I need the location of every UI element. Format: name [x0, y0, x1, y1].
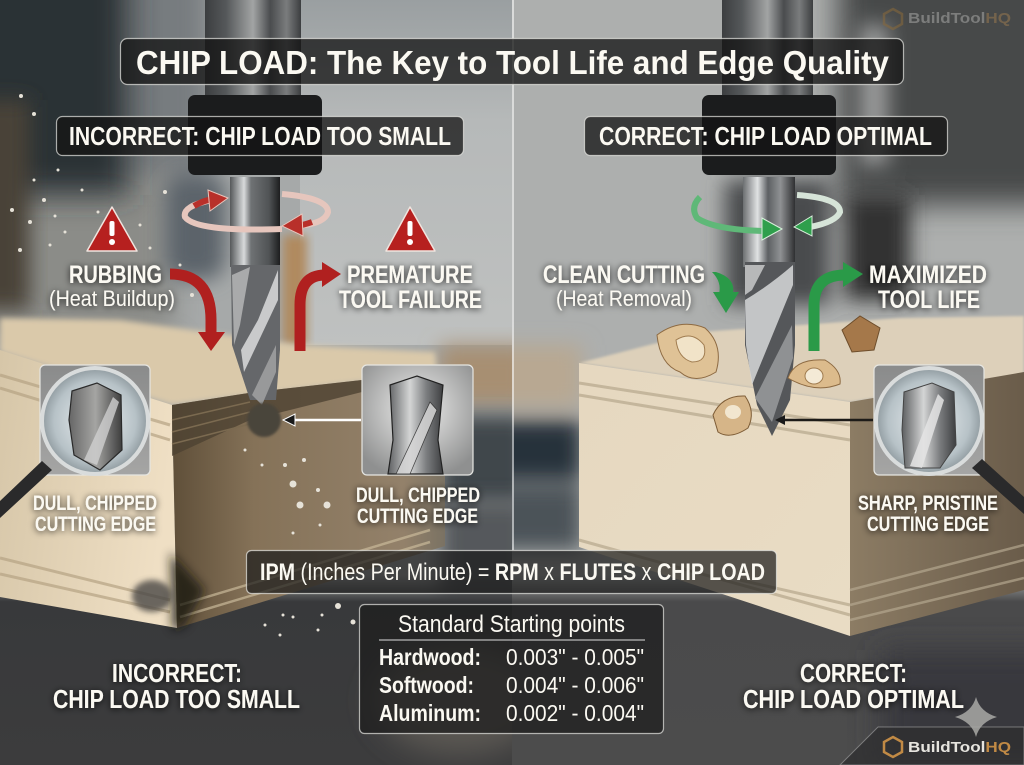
label: heat removal: (Heat Removal): [556, 286, 692, 311]
rotation ring: [797, 195, 840, 227]
centre divider: [512, 0, 514, 550]
table: standard starting points: [360, 604, 664, 734]
magnifier handle: [0, 461, 52, 518]
arrow tails: [194, 199, 312, 226]
left face: [0, 350, 177, 628]
left plywood block: [0, 318, 445, 630]
left spindle and drill: [188, 0, 322, 437]
rotation ring: [185, 194, 328, 230]
title: CHIP LOAD: The Key to Tool Life and Edge Quality: [136, 44, 890, 81]
left face: [579, 363, 850, 636]
label: premature: PREMATURE: [347, 261, 473, 289]
row: hardwood: [379, 644, 644, 670]
spindle column: [722, 0, 813, 96]
arrow head: [762, 218, 782, 240]
warning icon: rubbing: [87, 207, 137, 251]
spindle column: [205, 0, 301, 96]
background: right panel: [490, 0, 1024, 765]
shaving: [657, 324, 718, 378]
row: softwood: [379, 672, 644, 698]
watermark: top logo: [884, 9, 1011, 29]
shank: [743, 177, 795, 267]
formula box: [246, 550, 776, 594]
top face: [579, 316, 1024, 402]
dull drill bit: [388, 376, 443, 474]
labels: [33, 261, 998, 714]
sharp drill tip: [902, 383, 956, 468]
shank: [230, 177, 280, 267]
corner badge: [840, 727, 1024, 765]
shaving: [842, 316, 880, 352]
table heading: Standard Starting points: [398, 611, 625, 638]
right face: [850, 372, 1024, 636]
label: maximized: MAXIMIZED: [869, 261, 987, 289]
wood shavings: [657, 316, 880, 435]
right plywood block: [579, 316, 1024, 636]
row: hardwood: Hardwood:: [379, 644, 481, 670]
heading: incorrect: INCORRECT: CHIP LOAD TOO SMALL: [69, 121, 451, 151]
verdict: incorrect line two: CHIP LOAD TOO SMALL: [53, 684, 300, 714]
verdict: correct line one: CORRECT:: [800, 658, 907, 688]
arrow: premature failure up: [300, 262, 341, 351]
top face: [0, 318, 440, 405]
shaving: [713, 396, 751, 435]
row: hardwood: 0.003" - 0.005": [506, 644, 644, 670]
sawdust particles: [10, 94, 356, 636]
arrow: rubbing down: [170, 274, 225, 351]
caption: sharp cutting edge: CUTTING EDGE: [867, 513, 989, 536]
warning icon: premature failure: [386, 207, 435, 251]
watermark: top logo: BuildTool HQ: [908, 10, 1011, 27]
fluted bit: [231, 265, 280, 405]
formula box: IPM (Inches Per Minute) = RPM x FLUTES x CHIP LOAD: [260, 559, 765, 586]
shaving: [788, 360, 840, 388]
panel: right dull bit detail: [362, 365, 473, 475]
row: aluminum: 0.002" - 0.004": [506, 700, 644, 726]
row: aluminum: [379, 700, 644, 726]
icon: sparkle: [955, 697, 997, 737]
verdict: incorrect line one: INCORRECT:: [112, 658, 242, 688]
arrow head: [208, 190, 228, 211]
label: heat buildup: (Heat Buildup): [49, 286, 175, 311]
fluted bit: [745, 262, 795, 436]
panel: right magnifier detail: [874, 365, 1024, 514]
chipped dust cluster: [247, 403, 281, 437]
panel: left magnifier detail: [0, 365, 150, 518]
label: clean cutting: CLEAN CUTTING: [543, 261, 705, 289]
logo: bottom: [884, 737, 1011, 757]
dull drill tip: [69, 383, 122, 470]
arrow head: [282, 214, 303, 236]
arrow: clean cutting down: [712, 272, 739, 313]
collar: [188, 95, 322, 175]
arrow head: [794, 216, 812, 236]
magnifier handle: [972, 459, 1024, 514]
heading: incorrect: [56, 116, 464, 156]
heading: correct: [584, 116, 948, 156]
lens: [42, 368, 148, 474]
label: tool life: TOOL LIFE: [878, 286, 980, 314]
lens: [876, 368, 982, 474]
label: tool failure: TOOL FAILURE: [339, 286, 482, 314]
heading: correct: CORRECT: CHIP LOAD OPTIMAL: [599, 121, 932, 151]
right face: [172, 380, 445, 628]
collar: [702, 95, 836, 175]
row: softwood: 0.004" - 0.006": [506, 672, 644, 698]
burn mark: [132, 552, 205, 630]
caption: right dull edge: DULL, CHIPPED: [356, 484, 480, 507]
caption: left cutting edge: CUTTING EDGE: [35, 513, 156, 536]
right rotation arrows: [694, 195, 840, 240]
logo: bottom: BuildTool HQ: [908, 739, 1011, 756]
left rotation arrows: [185, 190, 328, 236]
label: rubbing: RUBBING: [69, 261, 162, 289]
caption: left dull edge: DULL, CHIPPED: [33, 492, 157, 515]
caption: right cutting edge: CUTTING EDGE: [357, 505, 478, 528]
callout arrow: left: [283, 414, 361, 426]
row: aluminum: Aluminum:: [379, 700, 481, 726]
row: softwood: Softwood:: [379, 672, 474, 698]
verdict: correct line two: CHIP LOAD OPTIMAL: [743, 684, 964, 714]
background: left panel: [0, 0, 545, 765]
callout arrow: right: [775, 415, 873, 425]
arrow: maximized tool life up: [814, 262, 863, 351]
right spindle and drill: [702, 0, 836, 436]
